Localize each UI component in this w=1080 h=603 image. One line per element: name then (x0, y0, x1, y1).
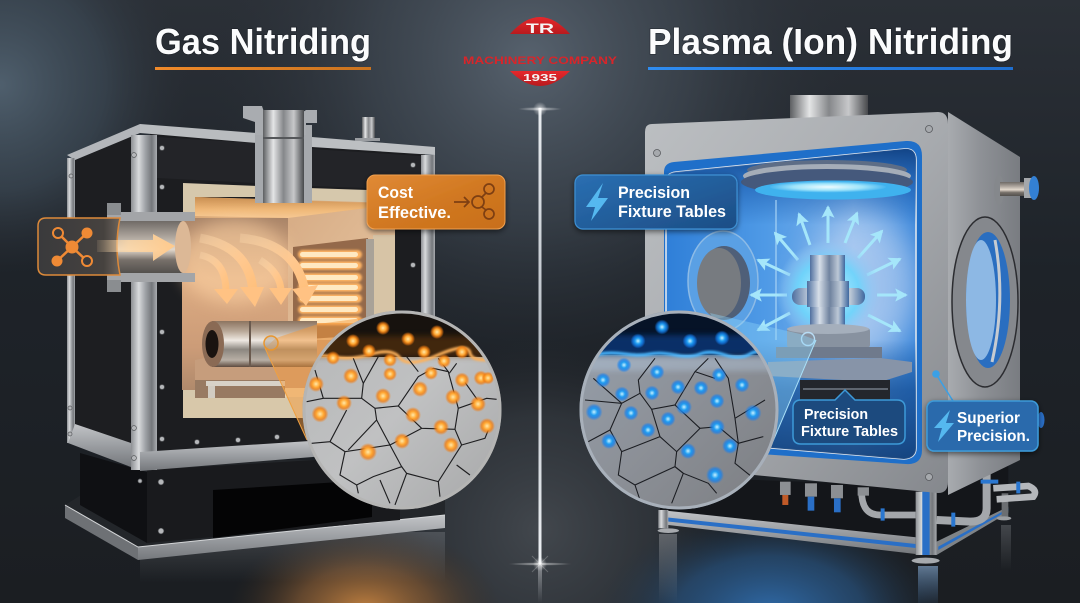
arrows: plasma ions radiating (751, 207, 906, 331)
chamber front plate (645, 112, 948, 493)
furnace base plate (65, 460, 445, 560)
workpiece cylinder (202, 321, 317, 367)
furnace front black body (150, 132, 425, 455)
support frame and plumbing (658, 458, 1035, 564)
heating coils (293, 238, 374, 340)
gas nozzles (780, 482, 869, 512)
callout: Cost Effective: Cost (378, 184, 413, 202)
top electrode disc (741, 160, 913, 200)
magnified view: gas diffusion (300, 305, 505, 515)
plumbing pipes (862, 458, 1035, 527)
callout: Precision Fixture Tables (bottom): Fixture Tables (801, 423, 898, 440)
fixture table stack (768, 324, 912, 400)
callout: Precision Fixture Tables (top): Fixture Tables (618, 203, 726, 221)
icon: lightning bolt (934, 410, 954, 442)
furnace black base (80, 453, 400, 543)
callout: Precision Fixture Tables (bottom) (793, 390, 905, 444)
chimney flue (243, 106, 317, 203)
metal grain boundaries (307, 357, 497, 505)
top nipple (355, 117, 380, 141)
gas inlet pipe (107, 203, 195, 292)
callout: Superior Precision: Superior (957, 410, 1020, 427)
frame rails (658, 463, 1011, 564)
logo: TR Machinery Company 1935: 1935 (523, 73, 558, 84)
callout: Precision Fixture Tables (top) (575, 175, 737, 229)
furnace left side panel (67, 124, 140, 467)
rear blue fitting (1038, 412, 1044, 428)
furnace panels (157, 137, 421, 190)
callout: Cost Effective: Effective. (378, 204, 451, 222)
side viewport window (952, 217, 1018, 387)
chamber side wall (948, 112, 1020, 495)
panel: gas nitriding furnace (38, 106, 505, 560)
rivets (654, 126, 932, 480)
callout: Precision Fixture Tables (top): Precision (618, 184, 690, 202)
magnifier cone: gas (264, 315, 385, 470)
nitrogen ion dots (586, 320, 762, 484)
workpiece with plasma glow (776, 240, 880, 344)
arrow: gas flow into pipe (97, 234, 175, 261)
magnifier cone: plasma (710, 313, 816, 453)
work support stand (195, 380, 285, 398)
magnified view: plasma diffusion (578, 305, 783, 515)
side gas fitting (994, 175, 1039, 205)
arrows: curved gas flow (200, 238, 318, 307)
logo: TR Machinery Company 1935 (463, 17, 618, 86)
nitrogen dots (308, 321, 495, 461)
furnace front posts and rails (131, 124, 435, 471)
title: Gas Nitriding: Gas Nitriding (155, 21, 371, 62)
callout: Cost Effective (367, 175, 505, 229)
logo: TR Machinery Company 1935: TR (526, 20, 554, 36)
callout: Superior Precision (927, 370, 1038, 451)
floor reflections (140, 525, 1011, 603)
rivets (68, 146, 415, 534)
callout: Superior Precision: Precision. (957, 428, 1030, 445)
panel: plasma nitriding chamber (575, 95, 1044, 564)
icon callout: gas source (38, 218, 120, 275)
callout: Precision Fixture Tables (bottom): Precision (804, 406, 868, 423)
title underline: orange (155, 67, 371, 70)
icon: arrow into branching nodes (454, 184, 494, 219)
icon: lightning bolt (586, 183, 608, 221)
chamber interior window (660, 141, 925, 465)
chimney top (790, 95, 868, 125)
furnace chamber interior (180, 183, 395, 418)
metal grain boundaries (585, 358, 765, 503)
center divider (508, 102, 572, 603)
title underline: blue (648, 67, 1013, 70)
logo: TR Machinery Company 1935: MACHINERY COMPANY (463, 55, 618, 67)
title: Plasma (Ion) Nitriding: Plasma (Ion) Nitriding (648, 21, 1013, 62)
inner port ring (688, 231, 758, 331)
icon: molecule network (52, 228, 92, 266)
